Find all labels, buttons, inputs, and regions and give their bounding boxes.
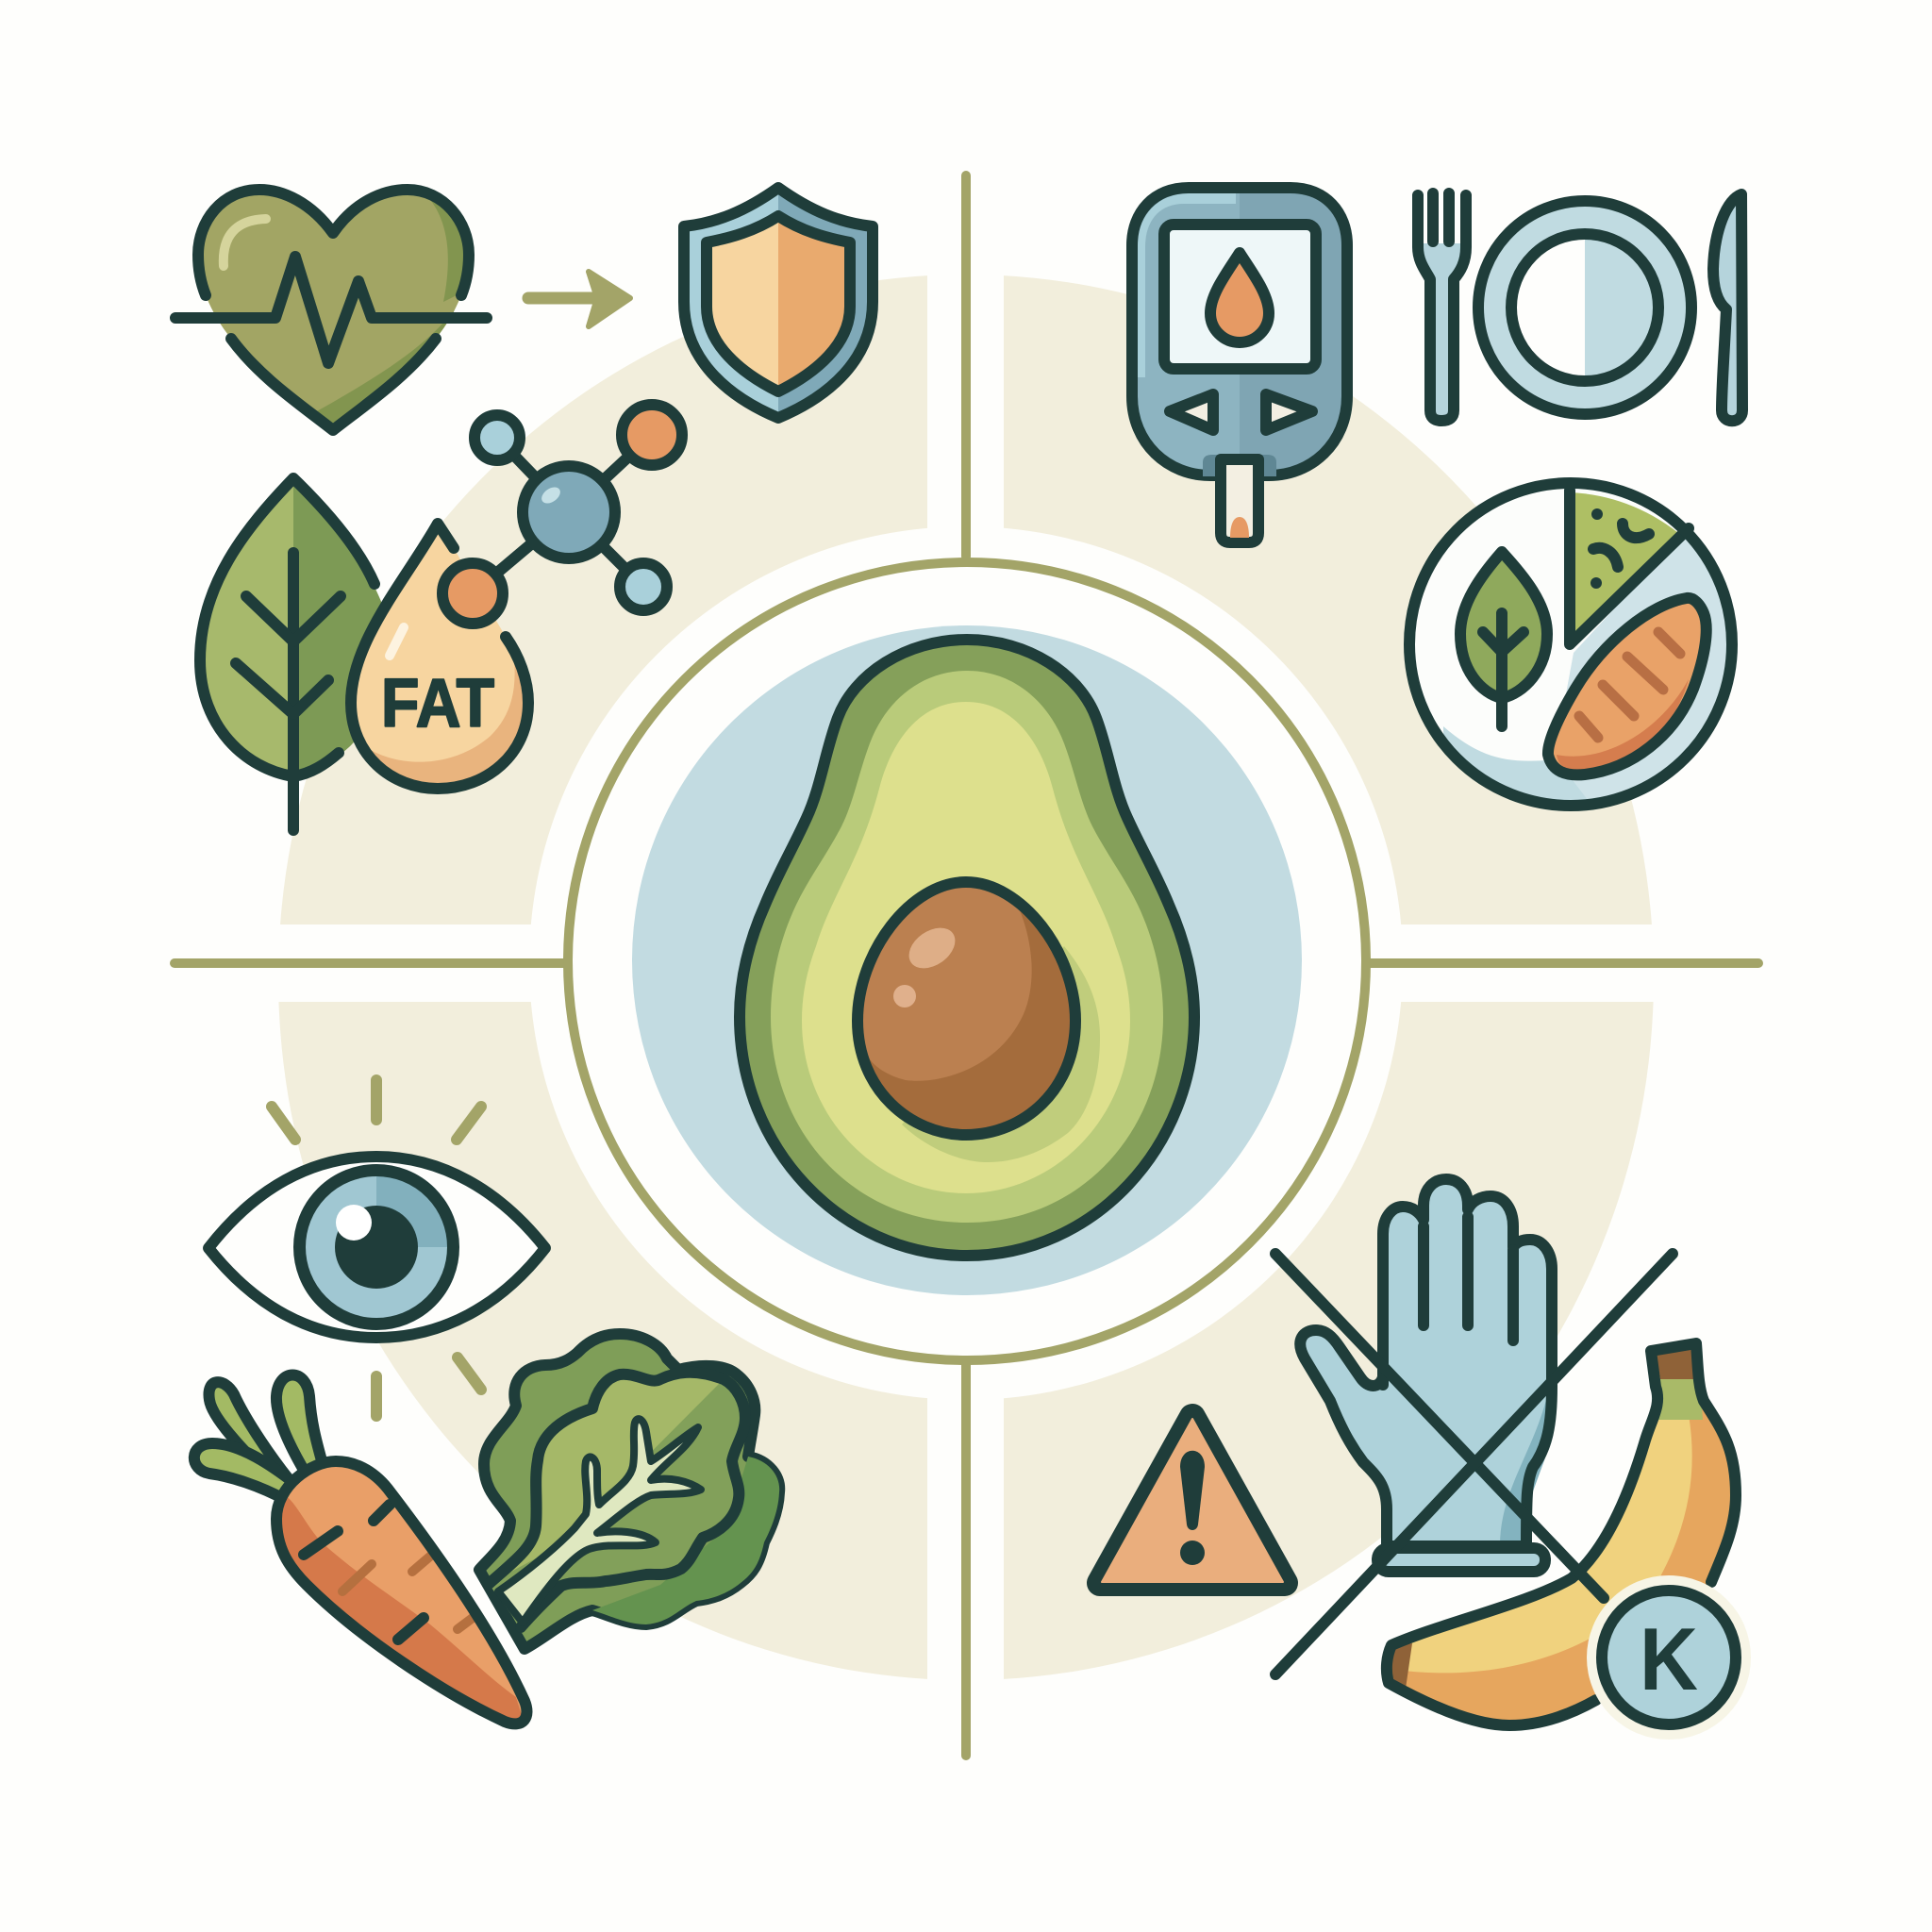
icon: warning triangle	[1100, 1417, 1285, 1583]
wedge dots and marks	[1591, 508, 1649, 589]
white central disc	[529, 526, 1403, 1400]
carrot body	[276, 1461, 526, 1724]
icon: molecule	[442, 405, 682, 624]
icon: glucose meter	[1132, 188, 1347, 542]
icon: banana	[1382, 1343, 1745, 1731]
arrow: heart to shield	[528, 272, 630, 326]
icon: potassium K badge	[1587, 1575, 1751, 1740]
meter screen	[1164, 225, 1316, 369]
icon: potassium K badge: K	[1640, 1609, 1698, 1708]
beige background quadrants	[278, 275, 1654, 1680]
avocado outline	[740, 640, 1194, 1256]
carrot tops	[194, 1375, 323, 1500]
avocado skin	[740, 640, 1194, 1256]
icon: carrot	[194, 1375, 528, 1736]
meter buttons	[1170, 394, 1213, 430]
avocado flesh outer	[771, 671, 1163, 1223]
blood drop	[1210, 253, 1269, 342]
icon: plate	[1478, 201, 1691, 414]
icon: leaf	[200, 478, 383, 830]
back leaf	[479, 1334, 779, 1649]
icon: fat drop	[351, 524, 528, 789]
icon: eye with rays	[208, 1080, 545, 1416]
avocado pit	[840, 868, 1075, 1135]
icon: balanced diet plate	[1409, 483, 1755, 821]
icon: cross-out lines	[1275, 1254, 1673, 1674]
blue disc behind avocado	[632, 625, 1302, 1295]
front leaf	[489, 1373, 745, 1627]
avocado flesh inner	[802, 702, 1130, 1193]
shadow under pit	[902, 946, 1100, 1162]
olive ring around centre	[568, 562, 1366, 1360]
test strip	[1203, 455, 1276, 476]
icon: glove	[1300, 1179, 1552, 1572]
icon: shield	[683, 182, 874, 420]
small leaf	[1460, 552, 1547, 726]
icon: heart with heartbeat	[175, 190, 491, 443]
icon: lettuce	[479, 1334, 779, 1649]
carrot halo	[276, 1461, 526, 1724]
exclamation mark	[1180, 1451, 1205, 1530]
sweet potato	[1548, 598, 1707, 774]
pupil	[335, 1206, 418, 1289]
glove cuff	[1377, 1548, 1545, 1572]
lettuce rib	[498, 1419, 701, 1623]
central avocado	[740, 640, 1194, 1256]
icon: fork	[1418, 193, 1466, 421]
icon: knife	[1713, 194, 1742, 421]
iris	[299, 1170, 454, 1324]
meter body	[1132, 188, 1347, 475]
FAT label: FAT	[381, 666, 494, 741]
eye rays	[272, 1080, 481, 1416]
quadrant divider lines	[175, 175, 1758, 1756]
